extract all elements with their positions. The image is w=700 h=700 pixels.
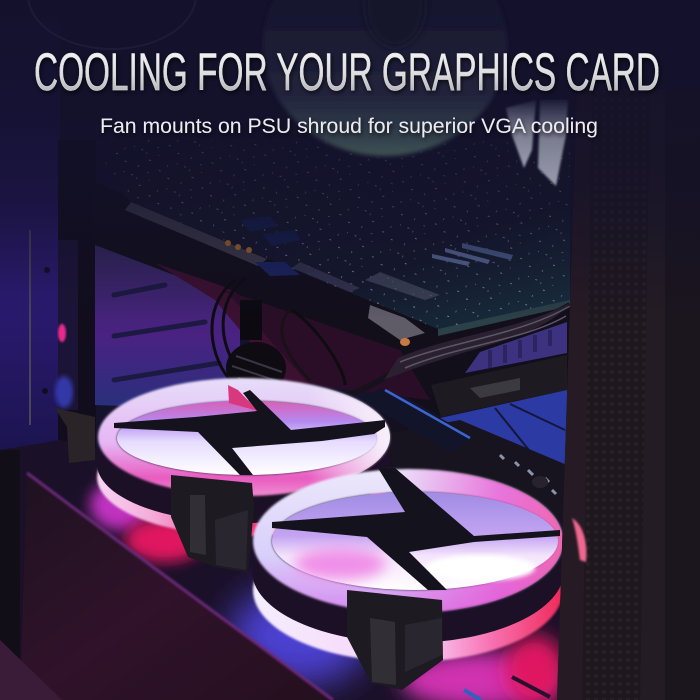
fan 1 dark band [97, 405, 391, 523]
motherboard [378, 420, 567, 520]
circuit board [97, 140, 570, 329]
right case pillar [557, 90, 700, 700]
fan 2 light ring [253, 469, 563, 613]
fan 1 frame corner [171, 475, 254, 573]
connector gold and blue [225, 240, 231, 246]
PCIe slot [360, 388, 471, 453]
fan 2 dark band [252, 499, 564, 643]
left case wall [0, 0, 96, 450]
top dark gradient [0, 0, 700, 320]
fan 1 hub and spokes [114, 390, 385, 475]
silver edge strip [125, 202, 267, 266]
white fan fins at top right [506, 100, 568, 186]
chips [240, 216, 278, 232]
fan 1 left bracket [55, 408, 95, 463]
fan 1 [55, 378, 391, 573]
fan 1 interior [117, 401, 377, 475]
cable bundle [212, 278, 570, 405]
fan 2 lower light ring [253, 518, 563, 662]
heat sink [465, 322, 567, 373]
fan 1 light ring [98, 378, 390, 496]
board lip [438, 300, 570, 336]
dark area behind fan 1 [240, 400, 520, 480]
fan 2 frame corner [347, 590, 443, 690]
fan tray plate [0, 440, 565, 700]
fan 2 interior [272, 492, 558, 590]
blue lit region under card [440, 390, 567, 470]
back panel with slots [95, 245, 240, 410]
graphics card [90, 140, 570, 417]
card underside [90, 180, 570, 417]
subtitle: Fan mounts on PSU shroud for superior VGA cooling [100, 115, 598, 138]
fan 1 lower light ring [97, 418, 391, 536]
pink light clip [572, 518, 586, 562]
fan 2 hub and spokes [272, 468, 560, 590]
front panel of shroud [0, 473, 333, 700]
top fan hub behind the title [28, 0, 507, 156]
fan 2 [252, 468, 564, 690]
